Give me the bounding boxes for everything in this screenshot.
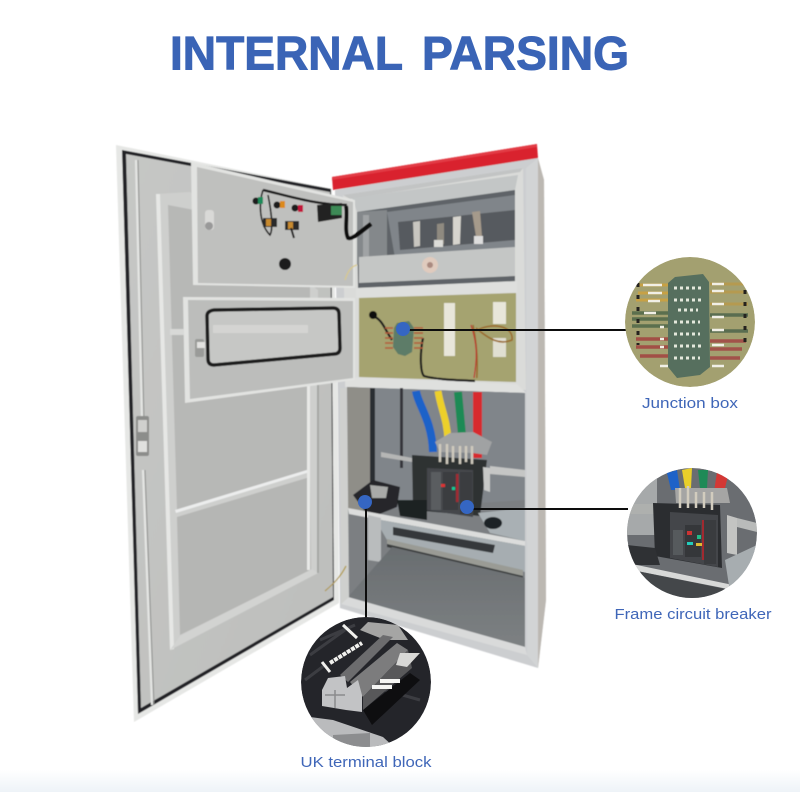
leader line: terminal block: [365, 502, 367, 618]
busbars: [413, 221, 420, 247]
open door: [116, 145, 371, 722]
callout label: frame circuit breaker: Frame circuit breaker: [614, 606, 772, 623]
white terminals: [643, 284, 724, 366]
mid rail: [356, 281, 517, 298]
marker: junction box: [396, 322, 410, 336]
title: INTERNAL: [170, 26, 403, 80]
marker: frame circuit breaker: [460, 500, 474, 514]
mounting shelf: [348, 508, 525, 546]
breaker body: [653, 503, 722, 568]
inspection window: [207, 308, 340, 365]
grey terminal bars: [340, 635, 393, 682]
yellow insulation panel: [359, 293, 516, 382]
wires: [636, 285, 668, 300]
shelf: [635, 564, 730, 588]
copper bars: [416, 391, 433, 452]
lower compartment: [347, 387, 525, 647]
wiring and indicators: [252, 190, 371, 238]
black gasket: [122, 150, 334, 714]
cabinet body: [332, 144, 546, 668]
white markers: [330, 643, 362, 663]
upper inner door: [191, 162, 371, 288]
door interior: [126, 154, 333, 708]
leader line: junction box: [403, 329, 626, 331]
raised door panel: [156, 192, 318, 650]
din rail: [387, 539, 523, 576]
marker: terminal block: [358, 495, 372, 509]
lower inner door with window: [170, 297, 355, 403]
upper compartment: [343, 168, 526, 390]
lower rail: [345, 377, 526, 393]
lower chassis: [312, 717, 389, 747]
callout label: UK terminal block: UK terminal block: [300, 754, 432, 771]
frame circuit breaker: [412, 444, 490, 517]
cabinet bottom edge: [341, 597, 527, 655]
callout photo: frame circuit breaker: [627, 468, 757, 598]
terminal strip: [668, 274, 710, 378]
cross panel: [359, 247, 515, 283]
silver mounting plate: [478, 508, 525, 541]
panel cross bar: [175, 469, 310, 513]
title: [170, 26, 629, 80]
leader line: frame circuit breaker: [467, 508, 628, 510]
window latch: [195, 339, 205, 357]
callout photo: UK terminal block: [301, 617, 431, 748]
locking rod: [136, 160, 152, 705]
red top cap: [332, 144, 538, 190]
door outer edge: [116, 145, 339, 722]
cabinet side and frame: [335, 156, 546, 668]
cabinet floor: [348, 547, 525, 647]
terminal ends: [322, 676, 362, 712]
latch: [205, 210, 214, 230]
callout label: junction box: Junction box: [642, 395, 739, 412]
title: PARSING: [422, 26, 629, 80]
callout photo: junction box: [625, 257, 755, 387]
recessed panels: [168, 205, 310, 510]
rails: [381, 452, 412, 462]
terminal block: [353, 480, 400, 518]
